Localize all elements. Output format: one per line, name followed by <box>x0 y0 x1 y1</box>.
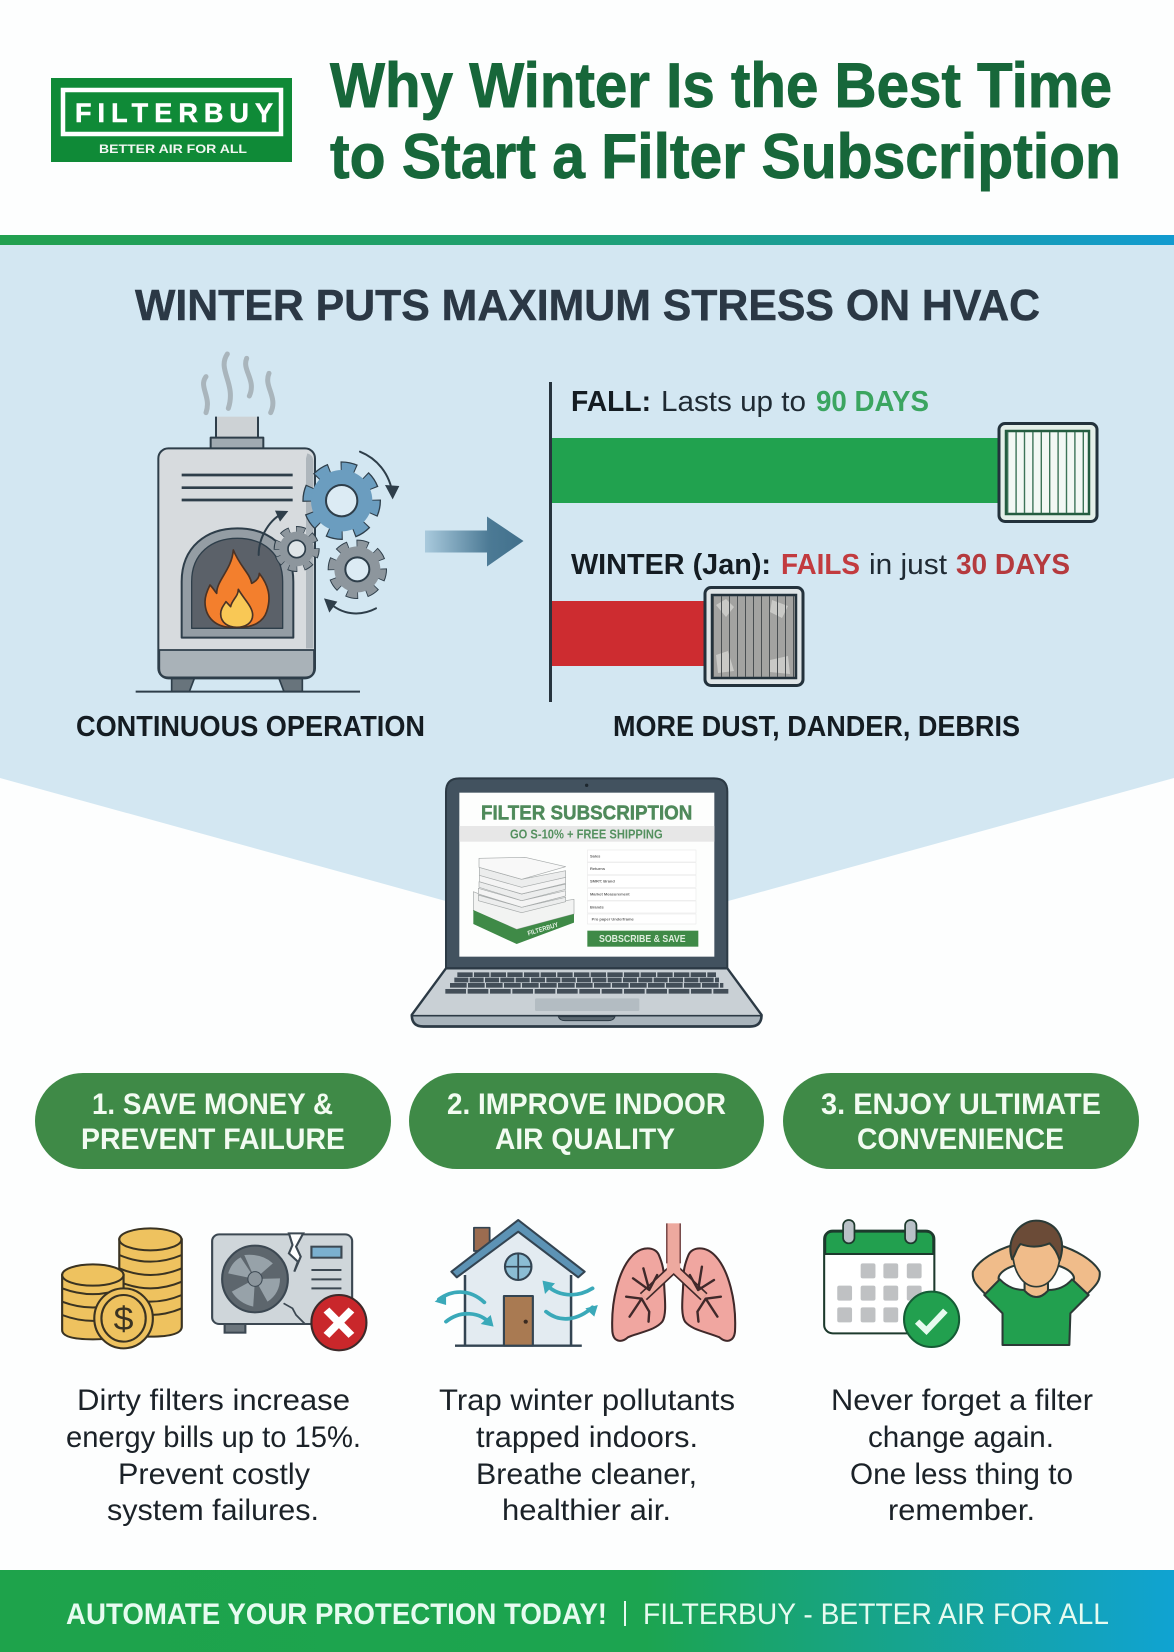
medium gear <box>332 544 382 594</box>
panel: winter stress background <box>0 245 1174 940</box>
gradient divider band <box>0 235 1174 245</box>
vents <box>182 475 293 500</box>
flame <box>205 550 269 627</box>
label: continuous operation: CONTINUOUS OPERATION <box>76 711 425 743</box>
text: indoor air description: Breathe cleaner, <box>476 1458 697 1491</box>
text: indoor air description: Trap winter pollutants <box>439 1384 735 1417</box>
fall label: FALL: <box>571 386 651 418</box>
dirty filter icon <box>705 588 803 686</box>
steam <box>204 354 273 413</box>
laptop: filter subscription page: Market Measurement <box>590 892 630 897</box>
chart: filter lifespan comparison <box>550 382 1097 702</box>
laptop: filter subscription page: Sales <box>590 853 601 858</box>
text: save money description: energy bills up to 15%. <box>66 1421 361 1454</box>
pill: save money <box>35 1073 391 1169</box>
rotation arrows <box>259 452 393 613</box>
pill: improve indoor air quality <box>409 1073 764 1169</box>
title <box>330 51 1121 192</box>
pill: save money: 1. SAVE MONEY & <box>92 1088 333 1121</box>
footer banner: FILTERBUY - BETTER AIR FOR ALL <box>643 1598 1109 1631</box>
icon: broken AC unit <box>212 1233 366 1350</box>
text: convenience description: change again. <box>868 1421 1054 1454</box>
icon: coin stacks: $ <box>114 1301 134 1338</box>
title: Why Winter Is the Best Time <box>330 51 1112 121</box>
large blue gear <box>309 468 375 534</box>
touchpad <box>535 998 639 1011</box>
laptop: filter subscription page: Pro paper Underframe <box>592 916 635 921</box>
laptop: filter subscription page: SOBSCRIBE & SAVE <box>599 934 686 945</box>
winter label: FAILS <box>781 549 860 581</box>
text: indoor air description: healthier air. <box>502 1494 671 1527</box>
icon: coin stacks <box>62 1228 182 1348</box>
chimney <box>216 417 258 439</box>
fall label: Lasts up to <box>661 386 806 418</box>
icon: calendar with check <box>824 1220 959 1347</box>
winter label: in just <box>869 549 947 581</box>
text: save money description <box>66 1384 361 1527</box>
laptop: filter subscription page: GO S-10% + FREE SHIPPING <box>510 827 663 841</box>
pill: ultimate convenience: 3. ENJOY ULTIMATE <box>821 1088 1101 1121</box>
laptop: filter subscription page: SMRT: Brand <box>590 879 615 884</box>
label: more dust, dander, debris: MORE DUST, DANDER, DEBRIS <box>613 711 1020 743</box>
winter bar <box>552 601 706 666</box>
text: save money description: Dirty filters increase <box>77 1384 350 1417</box>
pill: ultimate convenience <box>783 1073 1139 1169</box>
winter label: 30 DAYS <box>956 549 1070 581</box>
laptop base <box>412 968 762 1027</box>
laptop: filter subscription page: FILTERBUY <box>527 921 560 938</box>
text: save money description: Prevent costly <box>118 1458 310 1491</box>
offer strip <box>459 826 714 842</box>
icon: relaxed person <box>973 1221 1100 1345</box>
pill: ultimate convenience: CONVENIENCE <box>857 1123 1064 1156</box>
icon: furnace with gears <box>136 354 399 692</box>
text: indoor air description: trapped indoors. <box>476 1421 698 1454</box>
clean filter icon <box>999 424 1097 522</box>
laptop: filter subscription page <box>412 778 762 1027</box>
screen <box>459 793 714 957</box>
fall label <box>571 386 929 418</box>
logo: Filterbuy: BETTER AIR FOR ALL <box>99 144 247 156</box>
keyboard <box>445 975 728 991</box>
subscribe button <box>587 931 698 947</box>
laptop lid <box>446 778 727 970</box>
floor line <box>136 689 360 695</box>
arrow: furnace to filter lifespan <box>425 516 524 566</box>
text: convenience description: remember. <box>888 1494 1035 1527</box>
axis line <box>549 382 552 702</box>
heading: winter puts maximum stress: WINTER PUTS MAXIMUM STRESS ON HVAC <box>135 281 1040 330</box>
fall bar <box>552 438 1000 503</box>
fall label: 90 DAYS <box>816 386 929 418</box>
winter label: WINTER (Jan): <box>571 549 771 581</box>
logo: Filterbuy <box>51 78 292 162</box>
text: convenience description: Never forget a filter <box>831 1384 1093 1417</box>
title: to Start a Filter Subscription <box>330 122 1121 192</box>
small gear <box>278 530 316 568</box>
logo: Filterbuy: FILTERBUY <box>75 98 273 128</box>
footer banner <box>0 1570 1174 1652</box>
pill: improve indoor air quality: AIR QUALITY <box>495 1123 675 1156</box>
laptop: filter subscription page: Returns <box>590 866 606 871</box>
icon: house with airflow <box>435 1220 598 1346</box>
footer banner: AUTOMATE YOUR PROTECTION TODAY! <box>66 1598 607 1631</box>
feet <box>172 677 302 692</box>
signup form <box>587 850 696 924</box>
text: convenience description <box>831 1384 1093 1527</box>
filter stack <box>473 857 574 929</box>
icon: lungs <box>612 1223 735 1341</box>
laptop: filter subscription page: Brands <box>590 904 605 909</box>
text: convenience description: One less thing to <box>850 1458 1073 1491</box>
screen heading: FILTER SUBSCRIPTION <box>481 801 692 824</box>
text: save money description: system failures. <box>107 1494 319 1527</box>
winter label <box>571 549 1070 581</box>
pill: save money: PREVENT FAILURE <box>81 1123 345 1156</box>
furnace body <box>158 448 315 678</box>
firebox <box>182 528 293 638</box>
text: indoor air description <box>439 1384 735 1527</box>
pill: improve indoor air quality: 2. IMPROVE INDOOR <box>447 1088 726 1121</box>
